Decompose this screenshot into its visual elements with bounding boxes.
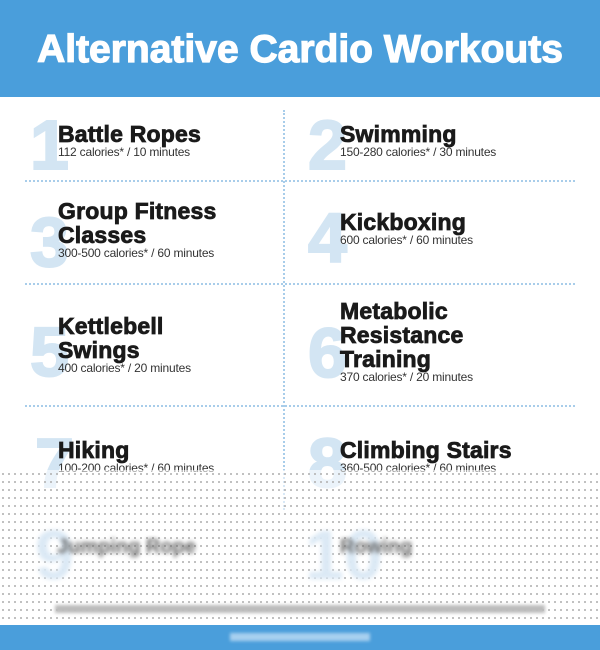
footer (0, 625, 600, 650)
item 1: 1 (30, 106, 69, 184)
item 10 blurred: Rowing (340, 536, 412, 558)
item 9 blurred (35, 516, 198, 594)
item 6: Training (340, 346, 431, 372)
header (0, 0, 600, 97)
item 10 blurred: 10 (305, 516, 383, 594)
item 4: 600 calories* / 60 minutes (340, 233, 473, 247)
item 1: 112 calories* / 10 minutes (58, 145, 190, 159)
item 5: Swings (58, 337, 140, 363)
item 4 (308, 199, 473, 277)
item 5 (30, 313, 191, 391)
item 7: 7 (35, 424, 74, 502)
item 3: 3 (30, 203, 69, 281)
item 5: 400 calories* / 20 minutes (58, 361, 191, 375)
item 9 blurred: Jumping Rope (57, 536, 196, 558)
item 1: Battle Ropes (58, 121, 201, 147)
item 6: Metabolic (340, 298, 448, 324)
item 2: 2 (308, 106, 347, 184)
item 6: 6 (308, 314, 347, 392)
item 3: 300-500 calories* / 60 minutes (58, 246, 214, 260)
item 4: Kickboxing (340, 209, 466, 235)
item 9 blurred: 9 (35, 516, 74, 594)
footnote blurred (55, 605, 545, 613)
dotted overlay (0, 470, 600, 650)
item 6: Resistance (340, 322, 463, 348)
title: Alternative Cardio Workouts (37, 28, 563, 71)
item 3: Group Fitness (58, 198, 217, 224)
item 3 (30, 198, 217, 281)
item 2 (308, 106, 496, 184)
item 2: 150-280 calories* / 30 minutes (340, 145, 496, 159)
item 2: Swimming (340, 121, 457, 147)
item 8: 360-500 calories* / 60 minutes (340, 461, 496, 475)
item 5: Kettlebell (58, 313, 164, 339)
item 6: 370 calories* / 20 minutes (340, 370, 473, 384)
footer source (230, 633, 370, 641)
item 8: 8 (308, 424, 347, 502)
item 1 (30, 106, 201, 184)
item 6 (308, 298, 473, 392)
item 7: 100-200 calories* / 60 minutes (58, 461, 214, 475)
item 8: Climbing Stairs (340, 437, 512, 463)
item 8 (308, 424, 512, 502)
item 4: 4 (308, 199, 347, 277)
item 3: Classes (58, 222, 146, 248)
item 5: 5 (30, 313, 69, 391)
item 7: Hiking (58, 437, 129, 463)
item 7 (35, 424, 214, 502)
